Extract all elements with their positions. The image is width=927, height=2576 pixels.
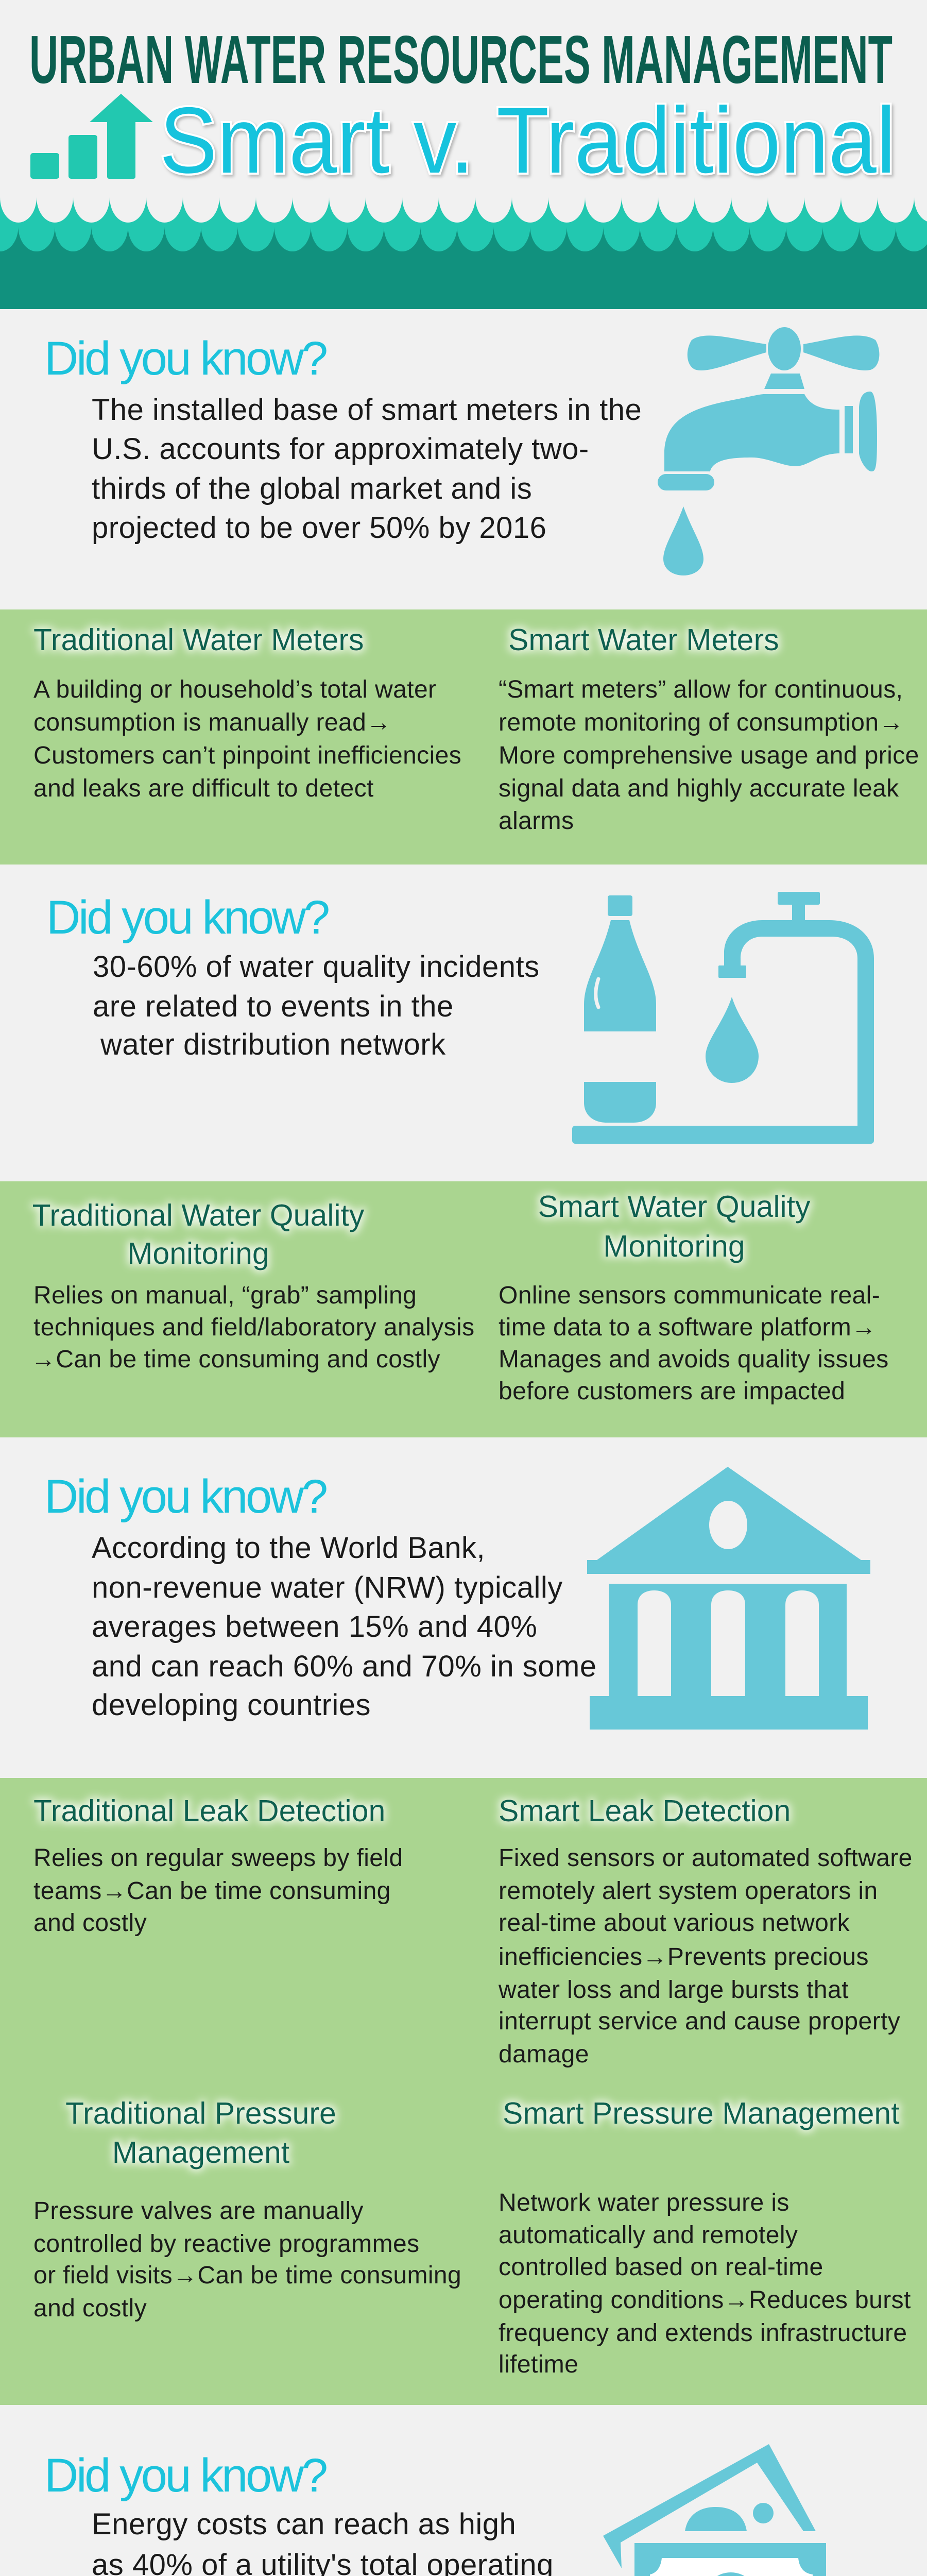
text: smart water quality monitoring: time data to a software platform→ [499,1314,877,1341]
icon: bank building [587,1467,870,1730]
header [29,22,896,193]
heading: smart leak detection: Smart Leak Detection [499,1794,791,1828]
heading: smart water meters: Smart Water Meters [508,623,779,657]
heading: did you know: Did you know? [44,2449,328,2502]
text: smart pressure management: Network water pressure is [499,2189,789,2216]
text: smart leak detection: inefficiencies→Prevents precious [499,1943,869,1971]
heading: did you know: Did you know? [44,1470,328,1523]
text: smart pressure management: lifetime [499,2351,578,2378]
text: traditional water quality monitoring: Relies on manual, “grab” sampling [33,1282,417,1309]
heading: traditional water quality monitoring: Monitoring [127,1236,269,1270]
text: NRW fact: non-revenue water (NRW) typically [92,1571,563,1604]
heading: traditional water meters: Traditional Water Meters [33,623,364,657]
text: traditional water meters: A building or household’s total water [33,676,436,703]
text: smart leak detection: damage [499,2041,589,2068]
heading: did you know: Did you know? [44,332,328,385]
heading: did you know: Did you know? [46,891,330,944]
heading: traditional water quality monitoring: Traditional Water Quality [32,1198,365,1232]
heading: smart water quality monitoring: Smart Water Quality [538,1190,811,1224]
heading: smart pressure management: Smart Pressure Management [503,2096,900,2130]
text: smart water quality monitoring: Online sensors communicate real- [499,1282,880,1309]
text: smart leak detection: water loss and large bursts that [498,1976,849,2004]
text: water quality fact: are related to events in the [93,990,454,1023]
text: traditional water quality monitoring: techniques and field/laboratory analysis [33,1314,475,1341]
icon: faucet with drop [658,327,879,575]
panel: did you know 2 (water quality) [46,891,874,1144]
panel: did you know 4 (energy costs) [44,2444,826,2576]
text: smart water meters: remote monitoring of consumption→ [499,709,904,736]
text: smart water meters: “Smart meters” allow for continuous, [499,676,903,703]
text: traditional leak detection: Relies on regular sweeps by field [33,1844,403,1872]
text: smart pressure management: automatically and remotely [499,2222,798,2249]
text: smart leak detection: Fixed sensors or automated software [499,1844,913,1872]
text: traditional pressure management: and costly [33,2295,147,2322]
text: smart water meters: More comprehensive usage and price [499,742,919,769]
text: traditional leak detection: teams→Can be time consuming [33,1877,391,1905]
text: traditional pressure management: controlled by reactive programmes [33,2230,420,2258]
panel: water meters comparison [0,609,927,865]
text: smart leak detection: real-time about various network [499,1909,850,1937]
text: smart leak detection: remotely alert system operators in [499,1877,878,1905]
heading: traditional leak detection: Traditional Leak Detection [33,1794,385,1828]
wave band [0,197,927,309]
text: traditional water meters: Customers can’t pinpoint inefficiencies [33,742,461,769]
text: smart water meters: signal data and highly accurate leak [499,775,899,802]
icon: rising bar chart arrow [30,94,153,179]
text: energy costs fact: Energy costs can reach as high [92,2507,516,2541]
text: traditional pressure management: or field visits→Can be time consuming [33,2262,461,2289]
text: traditional water meters: and leaks are difficult to detect [33,775,374,802]
text: water quality fact: 30-60% of water quality incidents [93,950,540,984]
text: traditional leak detection: and costly [33,1909,147,1937]
text: traditional pressure management: Pressure valves are manually [33,2197,364,2225]
panel: water quality monitoring comparison [0,1181,927,1437]
text: NRW fact: and can reach 60% and 70% in some [92,1650,597,1683]
text: NRW fact: developing countries [92,1688,371,1722]
panel: did you know 3 (non-revenue water) [44,1467,870,1730]
text: smart pressure management: controlled based on real-time [499,2253,823,2281]
panel: did you know 1 (smart meters) [44,327,879,575]
text: smart meters fact: U.S. accounts for approximately two- [92,432,589,466]
heading: smart water quality monitoring: Monitoring [603,1229,745,1263]
icon: bottle and tap [572,892,874,1144]
text: water quality fact: water distribution network [100,1028,446,1061]
heading: traditional pressure management: Management [112,2136,289,2170]
text: NRW fact: averages between 15% and 40% [92,1610,537,1643]
panel: leak detection and pressure management comparison [0,1778,927,2405]
text: smart pressure management: frequency and extends infrastructure [499,2319,907,2347]
text: smart pressure management: operating conditions→Reduces burst [499,2286,911,2314]
icon: money bills [603,2444,826,2576]
text: smart meters fact: The installed base of smart meters in the [92,393,642,427]
text: traditional water quality monitoring: →Can be time consuming and costly [31,1346,440,1373]
text: NRW fact: According to the World Bank, [92,1531,485,1565]
text: smart water quality monitoring: Manages and avoids quality issues [499,1346,889,1373]
text: smart water quality monitoring: before customers are impacted [499,1378,845,1405]
text: smart meters fact: thirds of the global market and is [92,472,532,505]
text: smart meters fact: projected to be over 50% by 2016 [92,511,546,545]
text: smart water meters: alarms [499,807,574,835]
text: traditional water meters: consumption is manually read→ [33,709,391,736]
text: smart leak detection: interrupt service and cause property [499,2008,900,2035]
heading: traditional pressure management: Traditional Pressure [65,2096,336,2130]
